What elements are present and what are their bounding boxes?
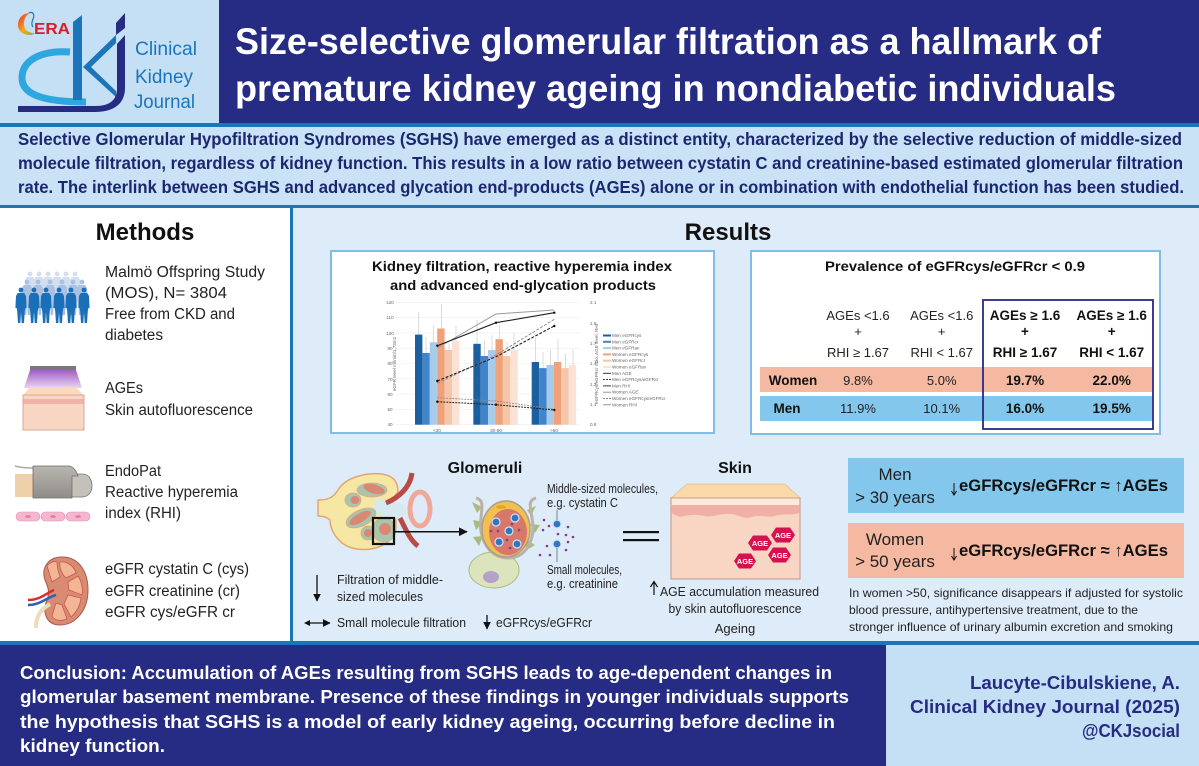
icon: EndoPat finger probe <box>15 466 92 521</box>
row: women: 5.0% <box>927 373 957 388</box>
icon: CKJ logo mark <box>18 13 125 112</box>
EndoPat text: index (RHI) <box>105 505 181 522</box>
row: women: 9.8% <box>843 373 873 388</box>
methods heading: Methods <box>96 219 194 246</box>
illustration: filtration detail <box>469 498 574 588</box>
axis labels: 70 <box>387 377 393 382</box>
equals sign <box>623 531 659 541</box>
illustration: skin with AGEs: AGE <box>752 539 768 548</box>
study text: diabetes <box>105 327 163 344</box>
table column headers: + <box>854 324 862 339</box>
note text: blood pressure, antihypertensive treatment, due to the <box>849 603 1138 617</box>
chart legend: Women AGE <box>612 390 638 395</box>
callout: men: Men <box>878 465 912 484</box>
axis labels: 110 <box>386 315 394 320</box>
AGE accumulation text: Ageing <box>715 621 755 636</box>
illustration: skin with AGEs: AGE <box>775 531 791 540</box>
panel: citation: Clinical Kidney Journal (2025) <box>910 696 1180 717</box>
axis labels: 1.8 <box>590 321 597 326</box>
callout: women <box>848 523 1184 578</box>
callout: women: > 50 years <box>855 552 935 571</box>
chart title <box>372 259 673 293</box>
chart legend: Men RHI <box>612 383 630 388</box>
title banner <box>219 0 1199 123</box>
callout: women: eGFRcys/eGFRcr ≈ ↑AGEs <box>959 541 1168 560</box>
note text: In women >50, significance disappears if adjusted for systolic <box>849 586 1183 600</box>
chart legend: Men eGFRav <box>612 346 640 351</box>
glomeruli heading: Glomeruli <box>448 460 522 477</box>
axis labels: 40 <box>387 422 393 427</box>
filtration text: sized molecules <box>337 590 423 604</box>
title banner: Size-selective glomerular filtration as a hallmark of <box>235 21 1102 62</box>
AGE hexagons <box>734 528 795 568</box>
axis labels: 2.1 <box>590 300 597 305</box>
skin heading: Skin <box>718 460 752 477</box>
group under 30 <box>415 328 459 425</box>
journal name: Kidney <box>135 66 193 88</box>
panel: citation: @CKJsocial <box>1082 720 1180 741</box>
chart title: Kidney filtration, reactive hyperemia index <box>372 259 673 274</box>
molecule labels: Middle-sized molecules, <box>547 482 658 496</box>
axis labels: 1.2 <box>590 382 597 387</box>
table column headers: RHI < 1.67 <box>910 345 973 360</box>
error bars <box>419 304 573 400</box>
axis labels: 50 <box>387 407 393 412</box>
study text: (MOS), N= 3804 <box>105 285 227 302</box>
AGE accumulation text: AGE accumulation measured <box>660 584 819 599</box>
icon: ERA logo: ERA <box>34 21 70 38</box>
blue divider <box>0 641 1199 645</box>
axis labels: eGFR level ml/min/1.73m2 <box>392 336 397 391</box>
chart legend: Men AGE <box>612 371 632 376</box>
axis labels <box>386 300 599 433</box>
axis labels: 1.4 <box>590 361 597 366</box>
chart legend: Women eGFRcys <box>612 352 649 357</box>
axis labels: 90 <box>387 346 393 351</box>
chart legend: Women eGFRcys/eGFRcr <box>612 396 666 401</box>
eGFR text: eGFR cys/eGFR cr <box>105 604 235 621</box>
icon: ERA logo <box>18 12 70 38</box>
axis labels: 80 <box>387 361 393 366</box>
illustration: skin with AGEs: AGE <box>771 551 788 560</box>
illustration: skin with AGEs: AGE <box>737 557 753 566</box>
panel: results <box>293 208 1199 641</box>
table column headers: RHI ≥ 1.67 <box>993 345 1057 360</box>
introduction panel <box>0 123 1199 208</box>
molecule labels <box>547 482 658 591</box>
logo panel <box>0 0 219 123</box>
panel: prevalence table <box>751 251 1160 434</box>
chart legend <box>603 333 666 407</box>
AGEs text <box>105 380 253 419</box>
callout: men: eGFRcys/eGFRcr ≈ ↑AGEs <box>959 476 1168 495</box>
table column headers: AGEs ≥ 1.6 <box>990 308 1061 323</box>
chart legend: Women RHI <box>612 402 637 407</box>
highlight box <box>983 300 1153 429</box>
row: men: 19.5% <box>1093 401 1131 416</box>
EndoPat text: EndoPat <box>105 463 162 480</box>
panel: conclusion: Conclusion: Accumulation of AGEs resulting from SGHS leads to age-dependent changes in <box>20 663 832 683</box>
axis labels: eGFRcys/eGFRcr ratio, AGE level, RHI <box>594 324 599 404</box>
journal name: Journal <box>134 91 195 113</box>
axis labels: 30-50 <box>490 428 502 433</box>
group 30 to 50 <box>473 339 518 425</box>
eGFR text: eGFR creatinine (cr) <box>105 583 240 600</box>
chart title: and advanced end-glycation products <box>390 278 656 293</box>
filtration text: Filtration of middle- <box>337 573 443 587</box>
note text <box>849 586 1183 634</box>
row: men: 11.9% <box>840 401 876 416</box>
callout: women: Women <box>866 530 924 549</box>
axis labels: 0.8 <box>590 422 597 427</box>
panel: citation: Laucyte-Cibulskiene, A. <box>970 672 1180 693</box>
illustration: glomerulus overview <box>318 473 430 549</box>
study text: Malmö Offspring Study <box>105 264 265 281</box>
molecule labels: e.g. creatinine <box>547 577 618 591</box>
filtration text <box>337 573 443 604</box>
panel: conclusion <box>0 645 886 766</box>
divider <box>290 208 293 641</box>
chart legend: Men eGFRcys/eGFRcr <box>612 377 659 382</box>
table title: Prevalence of eGFRcys/eGFRcr < 0.9 <box>825 259 1085 274</box>
panel: conclusion: kidney function. <box>20 736 165 756</box>
EndoPat text: Reactive hyperemia <box>105 484 238 501</box>
callout: men: > 30 years <box>855 488 935 507</box>
row: men <box>760 396 1152 421</box>
axis labels: 120 <box>386 300 394 305</box>
table column headers: AGEs ≥ 1.6 <box>1076 308 1147 323</box>
table column headers: + <box>1108 324 1116 339</box>
AGE accumulation text <box>650 582 819 636</box>
introduction panel: Selective Glomerular Hypofiltration Syndromes (SGHS) have emerged as a distinct entity, characterized by the selective reduction of middle-sized <box>18 129 1182 149</box>
chart legend: Men eGFRcys <box>612 333 642 338</box>
arrow: ratio down <box>486 615 488 629</box>
icon: skin autofluorescence <box>23 366 84 430</box>
AGEs text: Skin autofluorescence <box>105 402 253 419</box>
AGE accumulation text: by skin autofluorescence <box>668 601 802 616</box>
table column headers: RHI < 1.67 <box>1079 345 1144 360</box>
table column headers: + <box>1021 324 1029 339</box>
title banner: premature kidney ageing in nondiabetic individuals <box>235 68 1116 109</box>
results heading: Results <box>685 219 771 246</box>
chart legend: Women eGFRcr <box>612 358 646 363</box>
bar chart <box>386 300 666 433</box>
EndoPat text <box>105 463 238 522</box>
small molecule text: Small molecule filtration <box>337 616 466 630</box>
arrow: unchanged small molecule filtration <box>304 620 330 626</box>
table column headers: RHI ≥ 1.67 <box>827 345 889 360</box>
AGEs text: AGEs <box>105 380 143 397</box>
row: women: Women <box>769 373 817 388</box>
callout: men <box>848 458 1184 513</box>
arrow: zoom to detail <box>394 531 467 533</box>
table column headers <box>826 308 1147 360</box>
ratio text: eGFRcys/eGFRcr <box>496 616 592 630</box>
axis labels: >50 <box>550 428 558 433</box>
panel: chart <box>331 251 714 433</box>
axis labels: 60 <box>387 392 393 397</box>
arrow: filtration down <box>316 575 318 601</box>
row: women: 19.7% <box>1006 373 1044 388</box>
row: men: 10.1% <box>923 401 961 416</box>
study text <box>105 264 265 344</box>
chart legend: Women eGFRav <box>612 364 647 370</box>
icon: kidney <box>28 557 88 628</box>
journal name: Clinical <box>135 38 197 60</box>
axis labels: 1.1 <box>590 402 597 407</box>
group over 50 <box>532 362 576 425</box>
row: men: 16.0% <box>1006 401 1044 416</box>
axis labels: <30 <box>433 428 441 433</box>
row: women <box>760 367 1152 392</box>
table column headers: + <box>938 324 945 339</box>
journal name <box>134 38 197 113</box>
molecule labels: Small molecules, <box>547 563 622 577</box>
panel: methods <box>0 208 290 641</box>
panel: conclusion: glomerular basement membrane. Presence of these findings in younger individuals supports <box>20 687 849 707</box>
axis labels: 100 <box>386 331 394 336</box>
trend lines <box>437 310 554 410</box>
panel: conclusion: the hypothesis that SGHS is a model of early kidney ageing, occurring before decline in <box>20 712 835 732</box>
chart legend: Men eGFRcr <box>612 339 639 344</box>
row: men: Men <box>774 401 800 416</box>
study text: Free from CKD and <box>105 306 235 323</box>
row: women: 22.0% <box>1093 373 1131 388</box>
illustration: skin with AGEs <box>671 484 800 579</box>
note text: stronger influence of urinary albumin excretion and smoking <box>849 620 1173 634</box>
table column headers: AGEs <1.6 <box>910 308 973 323</box>
table column headers: AGEs <1.6 <box>826 308 890 323</box>
panel: citation <box>886 645 1199 766</box>
eGFR text <box>105 561 249 621</box>
molecule labels: e.g. cystatin C <box>547 496 618 510</box>
axis labels: 1.7 <box>590 341 597 346</box>
eGFR text: eGFR cystatin C (cys) <box>105 561 249 578</box>
icon: population <box>15 272 90 323</box>
